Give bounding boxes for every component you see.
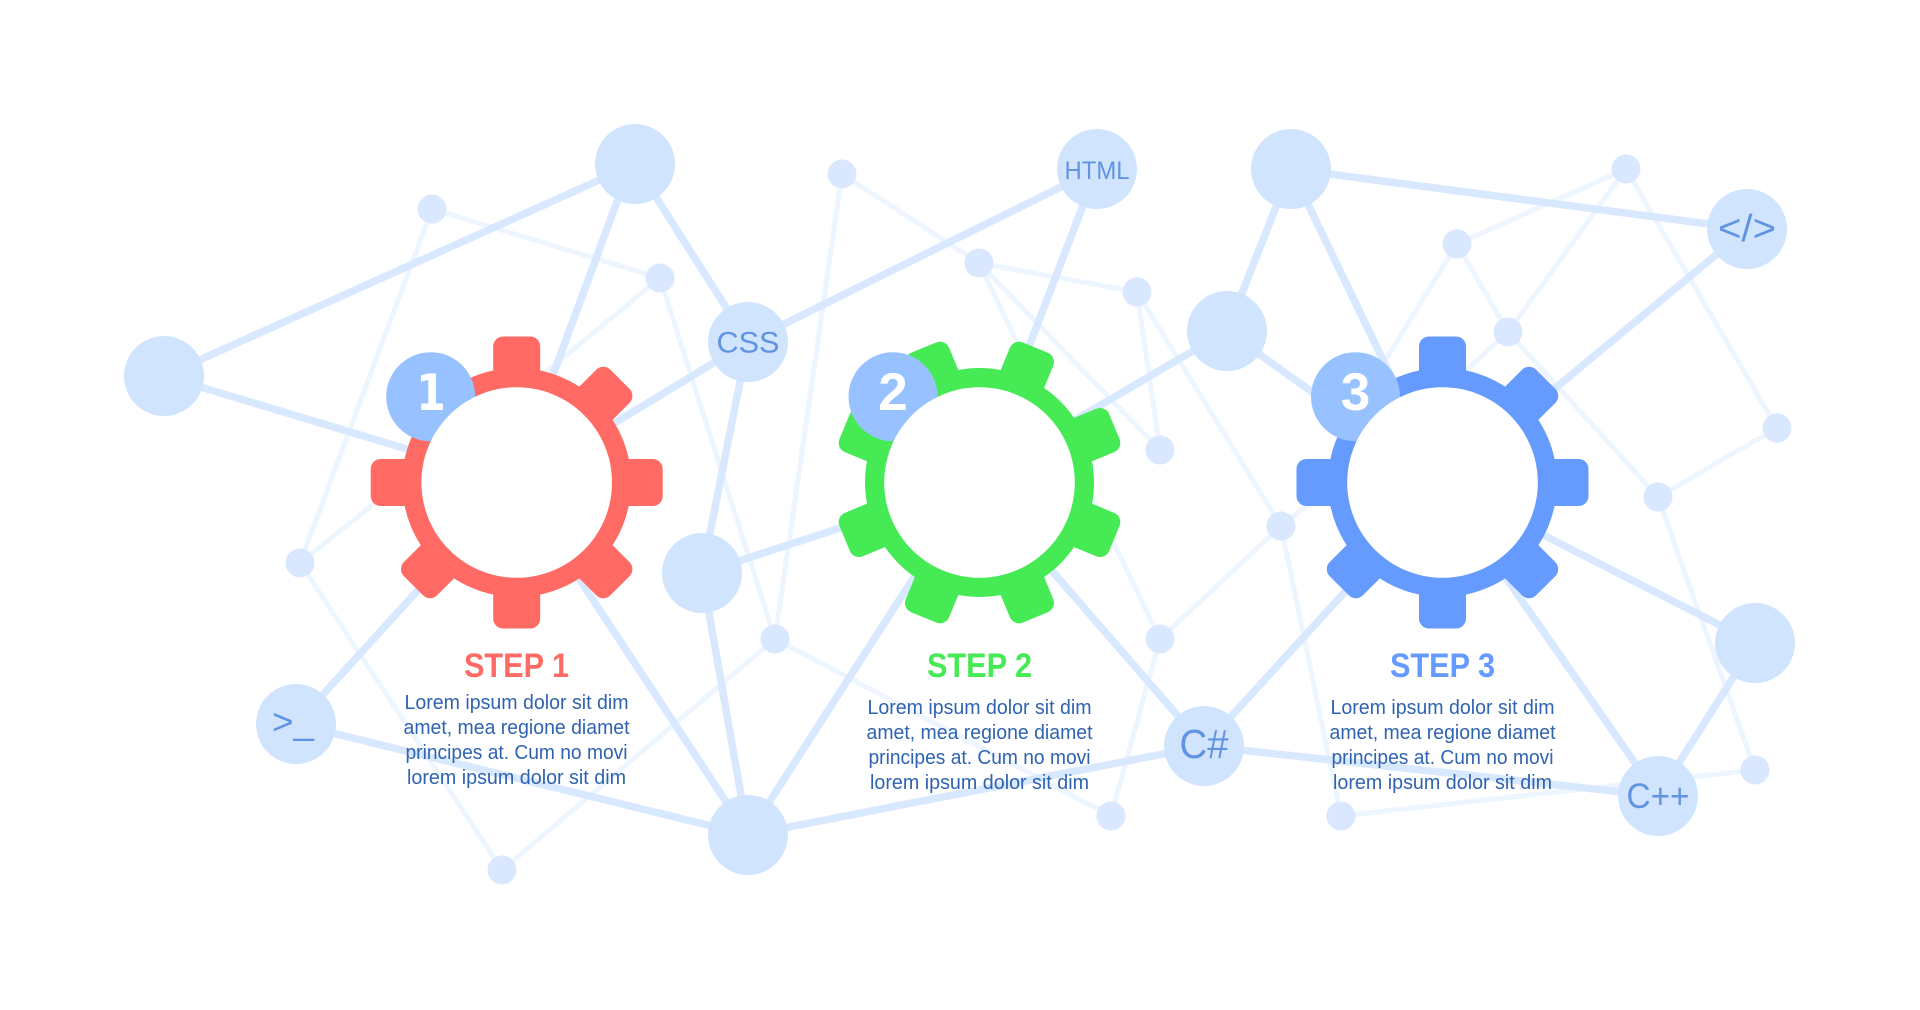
gear: step 3 blue (1296, 336, 1588, 628)
text block: step 3 description: Lorem ipsum dolor sit dim (1330, 697, 1554, 719)
text block: step 3 description: amet, mea regione diamet (1330, 722, 1556, 744)
badge: number 1: 1 (416, 364, 446, 422)
node: C plus plus: C++ (1626, 777, 1690, 816)
text block: step 2 description: principes at. Cum no movi (868, 747, 1090, 769)
heading: step 2: STEP 2 (927, 647, 1032, 685)
node: C plus plus (1618, 756, 1698, 836)
text block: step 3 description: lorem ipsum dolor sit dim (1333, 772, 1552, 794)
text block: step 2 description (866, 697, 1093, 794)
text block: step 1 description: lorem ipsum dolor sit dim (407, 767, 626, 789)
node: terminal prompt (256, 684, 336, 764)
badge: number 1 (386, 352, 612, 578)
node: C sharp: C# (1180, 721, 1229, 767)
large network nodes (124, 124, 1795, 875)
background network: thin connections (300, 169, 1777, 870)
heading: step 3: STEP 3 (1390, 647, 1495, 685)
badge: number 2: 2 (878, 363, 908, 422)
node: code tag (1707, 189, 1787, 269)
node: CSS: CSS (716, 326, 780, 360)
badge: number 2 (848, 352, 1075, 578)
gear: step 1 red (371, 336, 663, 628)
node: terminal prompt: >_ (272, 701, 315, 742)
small network nodes (286, 154, 1792, 884)
text block: step 2 description: lorem ipsum dolor sit dim (870, 772, 1089, 794)
badge: number 3 (1311, 352, 1538, 578)
text block: step 1 description: Lorem ipsum dolor sit dim (404, 692, 628, 714)
node: CSS (708, 302, 788, 382)
background network: thick connections (164, 164, 1755, 835)
text block: step 3 description (1330, 697, 1556, 794)
node: C sharp (1164, 706, 1244, 786)
text block: step 3 description: principes at. Cum no movi (1332, 747, 1554, 769)
text block: step 2 description: Lorem ipsum dolor sit dim (868, 697, 1092, 719)
text block: step 1 description: principes at. Cum no movi (406, 742, 628, 764)
text block: step 1 description (404, 692, 630, 789)
node: code tag: </> (1718, 208, 1776, 250)
text block: step 2 description: amet, mea regione diamet (866, 722, 1093, 744)
node: HTML (1057, 129, 1137, 209)
text block: step 1 description: amet, mea regione diamet (404, 717, 630, 739)
heading: step 1: STEP 1 (464, 647, 569, 685)
gear: step 2 green (789, 292, 1170, 673)
node: HTML: HTML (1064, 157, 1130, 185)
badge: number 3: 3 (1341, 363, 1370, 422)
